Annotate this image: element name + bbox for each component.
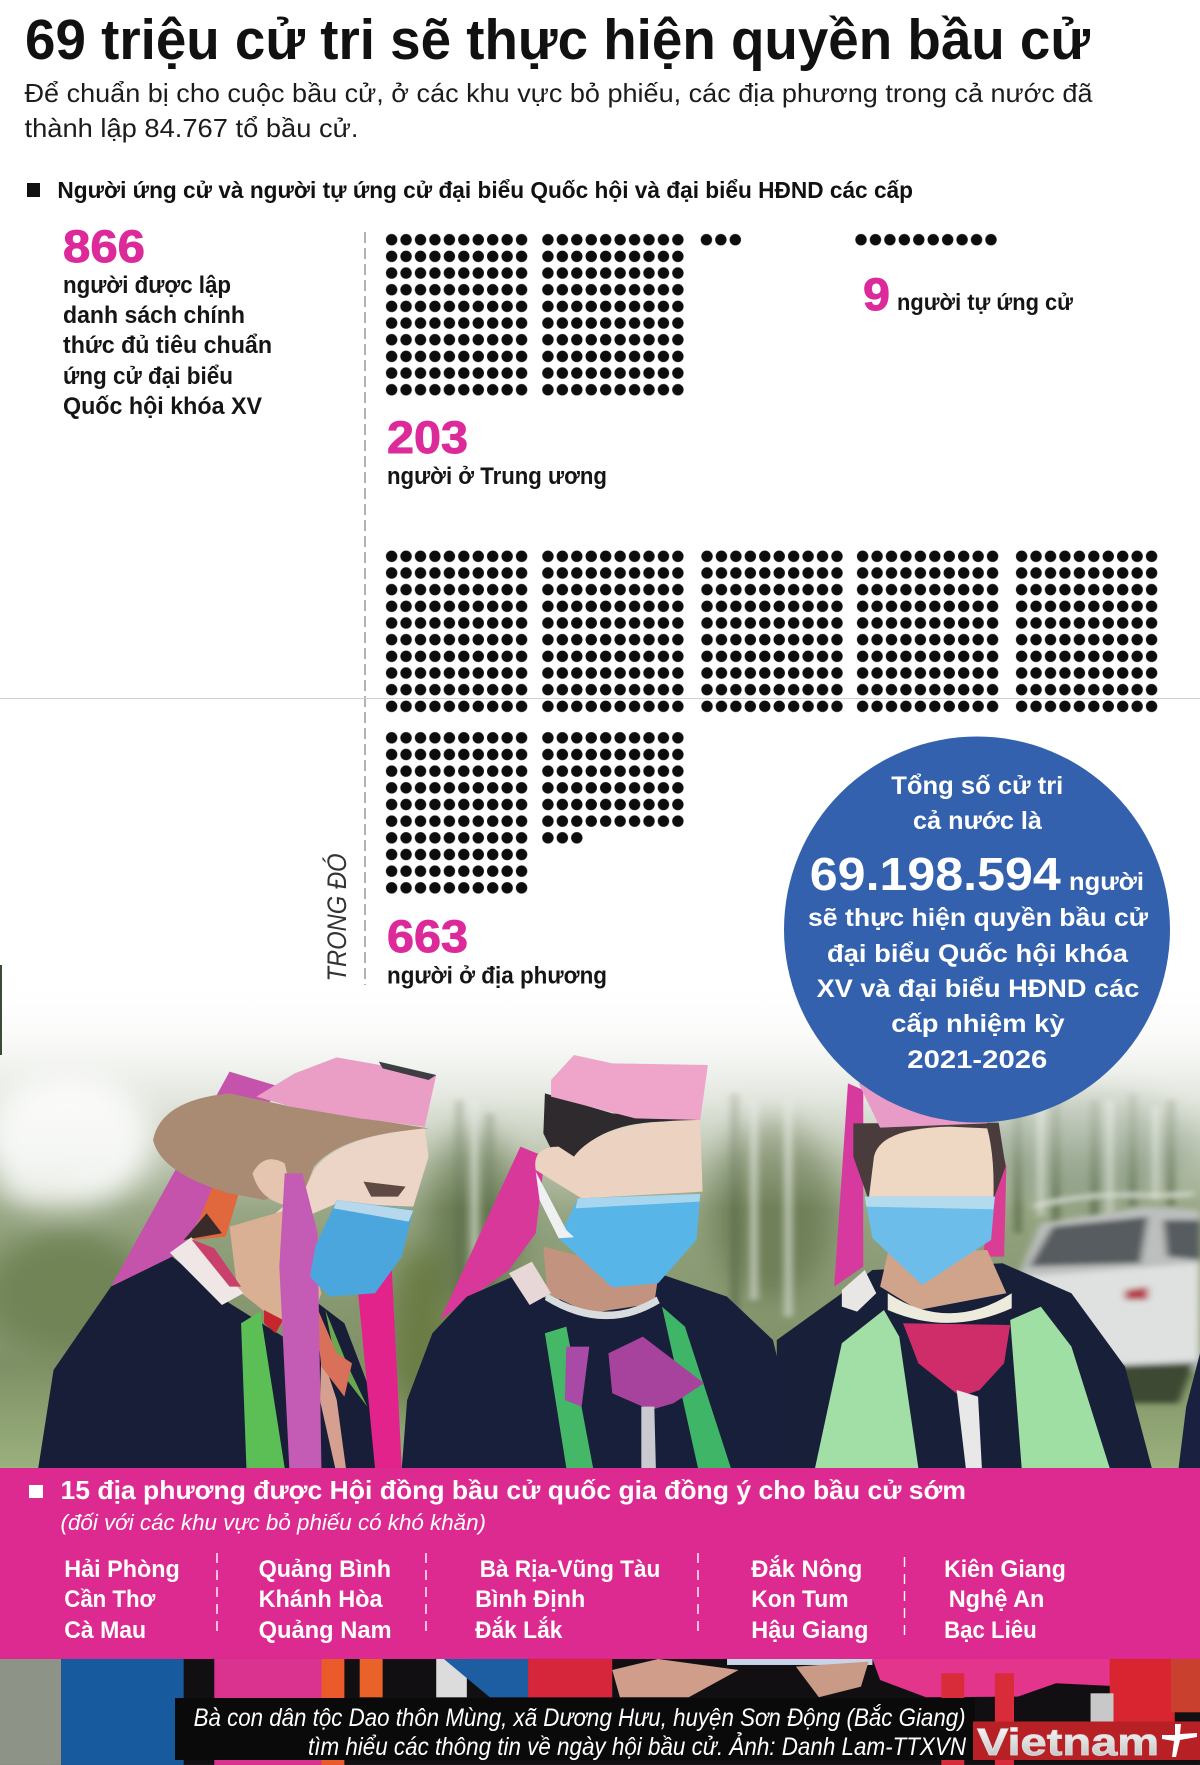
caption box: tìm hiểu các thông tin về ngày hội bầu cử. Ảnh: Danh Lam-TTXVN <box>308 1730 967 1761</box>
stat: 663 local: người ở địa phương <box>387 962 607 990</box>
callout: total voters circle: người <box>1069 868 1144 896</box>
intro text <box>24 78 1093 143</box>
panel heading <box>29 1475 966 1535</box>
stat: 663 local: 663 <box>387 911 468 962</box>
person at right edge <box>1179 1353 1200 1468</box>
column 4: Đắk Nông <box>751 1555 862 1583</box>
woman 1 <box>38 1057 436 1468</box>
callout: total voters circle: XV và đại biểu HĐND các <box>817 975 1139 1003</box>
stat: 866 candidates: người được lập <box>63 272 231 299</box>
stat: 866 candidates: ứng cử đại biểu <box>63 363 233 390</box>
panel heading: 15 địa phương được Hội đồng bầu cử quốc gia đồng ý cho bầu cử sớm <box>60 1475 966 1505</box>
stat: 203 central: 203 <box>387 412 468 463</box>
intro text: thành lập 84.767 tổ bầu cử. <box>24 113 358 143</box>
dot grid: 663 local <box>384 548 1159 896</box>
panel heading: (đối với các khu vực bỏ phiếu có khó khăn) <box>60 1510 486 1535</box>
column 3: Bình Định <box>475 1586 585 1613</box>
logo: Vietnam+: Vietnam <box>977 1722 1159 1764</box>
callout: total voters circle: 2021-2026 <box>907 1046 1047 1074</box>
panel: 15 localities early voting <box>0 1468 1200 1659</box>
section heading: candidates: Người ứng cử và người tự ứng cử đại biểu Quốc hội và đại biểu HĐND các cấp <box>57 177 913 203</box>
stat: 9 self-nominated: 9 <box>863 269 890 320</box>
title: 69 triệu cử tri sẽ thực hiện quyền bầu cử <box>25 8 1091 72</box>
stat: 203 central: người ở Trung ương <box>387 463 607 490</box>
stat: 663 local <box>387 911 607 990</box>
dot row: 9 self-nominated <box>854 231 998 248</box>
stat: 203 central <box>387 412 607 490</box>
callout: total voters circle: đại biểu Quốc hội khóa <box>827 940 1129 968</box>
stat: 866 candidates: danh sách chính <box>63 302 245 329</box>
column 1: Cần Thơ <box>64 1586 156 1613</box>
white fade over top of background <box>0 960 1200 1210</box>
stat: 866 candidates: 866 <box>63 221 145 272</box>
label: TRONG ĐÓ: TRONG ĐÓ <box>321 854 352 982</box>
woman 2 <box>402 1055 804 1468</box>
callout: total voters circle <box>784 736 1170 1122</box>
logo: Vietnam+ <box>973 1722 1200 1764</box>
woman 3 <box>777 1083 1152 1468</box>
caption box <box>175 1698 975 1761</box>
column 5: Bạc Liêu <box>944 1617 1037 1644</box>
intro text: Để chuẩn bị cho cuộc bầu cử, ở các khu vực bỏ phiếu, các địa phương trong cả nước đã <box>24 78 1093 108</box>
photo strip: detail of traditional costumes <box>0 1659 1200 1765</box>
column 2: Khánh Hòa <box>259 1586 383 1613</box>
photo: three Dao women wearing masks <box>0 960 1200 1468</box>
column 2: Quảng Nam <box>259 1617 392 1644</box>
callout: total voters circle: cả nước là <box>913 807 1042 835</box>
dashed divider <box>364 232 366 985</box>
column 4 <box>751 1555 868 1644</box>
column 5 <box>944 1556 1066 1644</box>
column 4: Hậu Giang <box>751 1617 868 1644</box>
stat: 866 candidates <box>63 221 272 420</box>
stat: 866 candidates: Quốc hội khóa XV <box>63 393 262 420</box>
column 3: Bà Rịa-Vũng Tàu <box>480 1556 660 1583</box>
column 5: Nghệ An <box>949 1586 1044 1613</box>
column 4: Kon Tum <box>751 1586 848 1613</box>
column 2 <box>259 1556 392 1644</box>
column 3 <box>475 1556 660 1644</box>
stat: 9 self-nominated <box>863 269 1073 320</box>
stat: 866 candidates: thức đủ tiêu chuẩn <box>63 332 272 359</box>
column 1: Hải Phòng <box>64 1556 180 1583</box>
caption box: Bà con dân tộc Dao thôn Mùng, xã Dương Hưu, huyện Sơn Động (Bắc Giang) <box>194 1703 966 1732</box>
column 1: Cà Mau <box>64 1617 146 1644</box>
stat: 9 self-nominated: người tự ứng cử <box>897 289 1073 315</box>
dot grid: 203 central <box>384 231 743 398</box>
callout: total voters circle: sẽ thực hiện quyền bầu cử <box>808 904 1149 932</box>
callout: total voters circle: Tổng số cử tri <box>891 772 1063 800</box>
column 2: Quảng Bình <box>259 1556 391 1583</box>
callout: total voters circle: 69.198.594 <box>810 848 1061 900</box>
column 1 <box>64 1556 180 1644</box>
callout: total voters circle: cấp nhiệm kỳ <box>891 1010 1065 1038</box>
column 5: Kiên Giang <box>944 1556 1066 1583</box>
column 3: Đắk Lắk <box>475 1616 563 1644</box>
